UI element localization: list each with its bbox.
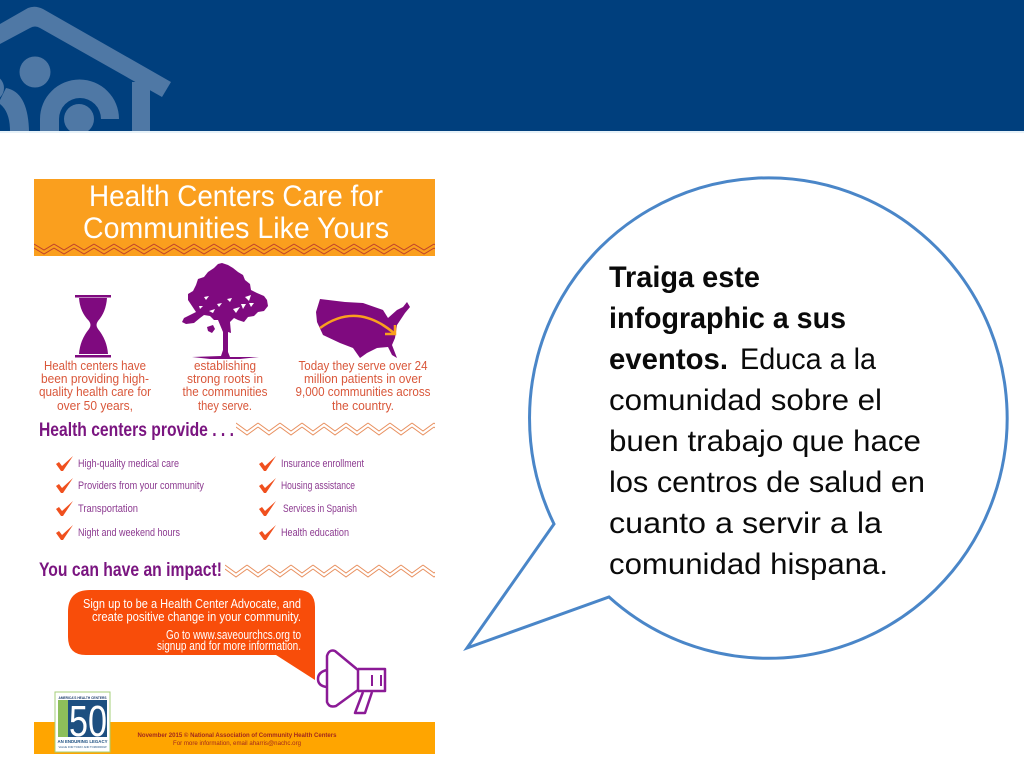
column text: roots: establishing — [194, 358, 256, 373]
speech bubble text: cuanto a servir a la — [609, 507, 882, 540]
callout: sign up — [68, 590, 315, 680]
speech bubble text: buen trabajo que hace — [609, 425, 921, 458]
services checklist: Housing assistance — [281, 480, 355, 492]
column text: reach: Today they serve over 24 — [298, 358, 428, 373]
column text: reach: the country. — [332, 398, 394, 413]
logo: 50 years badge: AMERICA'S HEALTH CENTERS — [58, 696, 107, 700]
title banner: Communities Like Yours — [83, 212, 389, 245]
icon: tree — [182, 263, 268, 359]
speech bubble text: los centros de salud en — [609, 466, 925, 499]
footer band: November 2015 © National Association of Community Health Centers — [138, 732, 337, 739]
callout: sign up: create positive change in your community. — [92, 609, 301, 624]
services checklist: Services in Spanish — [283, 503, 357, 515]
footer band — [34, 722, 435, 754]
header band — [0, 0, 1024, 134]
heading: health centers provide — [39, 420, 435, 441]
column text: roots: they serve. — [198, 398, 252, 413]
title banner: Health Centers Care for — [89, 180, 383, 213]
speech bubble text: Traiga este — [609, 261, 760, 294]
icon: megaphone — [318, 651, 385, 713]
logo: 50 years badge: VALUE FOR TODAY AND TOMORROW — [58, 745, 107, 749]
column text: history — [39, 358, 152, 413]
callout: sign up: signup and for more information. — [157, 638, 301, 653]
column text: history: over 50 years, — [57, 398, 133, 413]
column text: history: been providing high- — [41, 371, 149, 386]
column text: reach: million patients in over — [304, 371, 423, 386]
speech bubble — [467, 178, 1007, 658]
title banner — [34, 179, 435, 256]
header logo: house watermark — [0, 7, 171, 134]
column text: history: quality health care for — [39, 384, 152, 399]
column text: reach: 9,000 communities across — [296, 384, 431, 399]
speech bubble text: infographic a sus — [609, 302, 846, 335]
heading: health centers provide: Health centers provide . . . — [39, 420, 234, 441]
icon: US map with arrow — [316, 299, 410, 358]
logo: 50 years badge: AN ENDURING LEGACY — [58, 739, 108, 744]
infographic poster — [34, 179, 435, 754]
callout: sign up: Sign up to be a Health Center Advocate, and — [83, 596, 301, 611]
services checklist: Night and weekend hours — [78, 527, 180, 539]
services checklist — [56, 456, 364, 540]
services checklist: Providers from your community — [78, 480, 204, 492]
speech bubble text: comunidad hispana. — [609, 548, 888, 581]
heading: you can have an impact: You can have an impact! — [39, 560, 222, 581]
logo: 50 years badge: 50 — [69, 697, 107, 746]
column text: roots: the communities — [182, 384, 268, 399]
column text: roots — [182, 358, 268, 413]
speech bubble text: eventos. — [609, 343, 728, 376]
services checklist: Insurance enrollment — [281, 458, 364, 470]
check marks — [56, 456, 276, 540]
column text: roots: strong roots in — [187, 371, 263, 386]
services checklist: Health education — [281, 527, 349, 539]
services checklist: Transportation — [78, 503, 138, 515]
column text: history: Health centers have — [44, 358, 146, 373]
callout: sign up: Go to www.saveourchcs.org to — [166, 627, 301, 642]
footer band: For more information, email aharris@nachc.org — [173, 741, 301, 747]
speech bubble text — [609, 261, 925, 581]
logo: 50 years badge — [55, 692, 110, 752]
column text: reach — [296, 358, 431, 413]
services checklist: High-quality medical care — [78, 458, 179, 470]
heading: you can have an impact — [39, 560, 435, 581]
speech bubble text: Educa a la — [740, 343, 876, 376]
arrow — [320, 316, 395, 334]
speech bubble text: comunidad sobre el — [609, 384, 882, 417]
icon: hourglass — [75, 295, 111, 358]
